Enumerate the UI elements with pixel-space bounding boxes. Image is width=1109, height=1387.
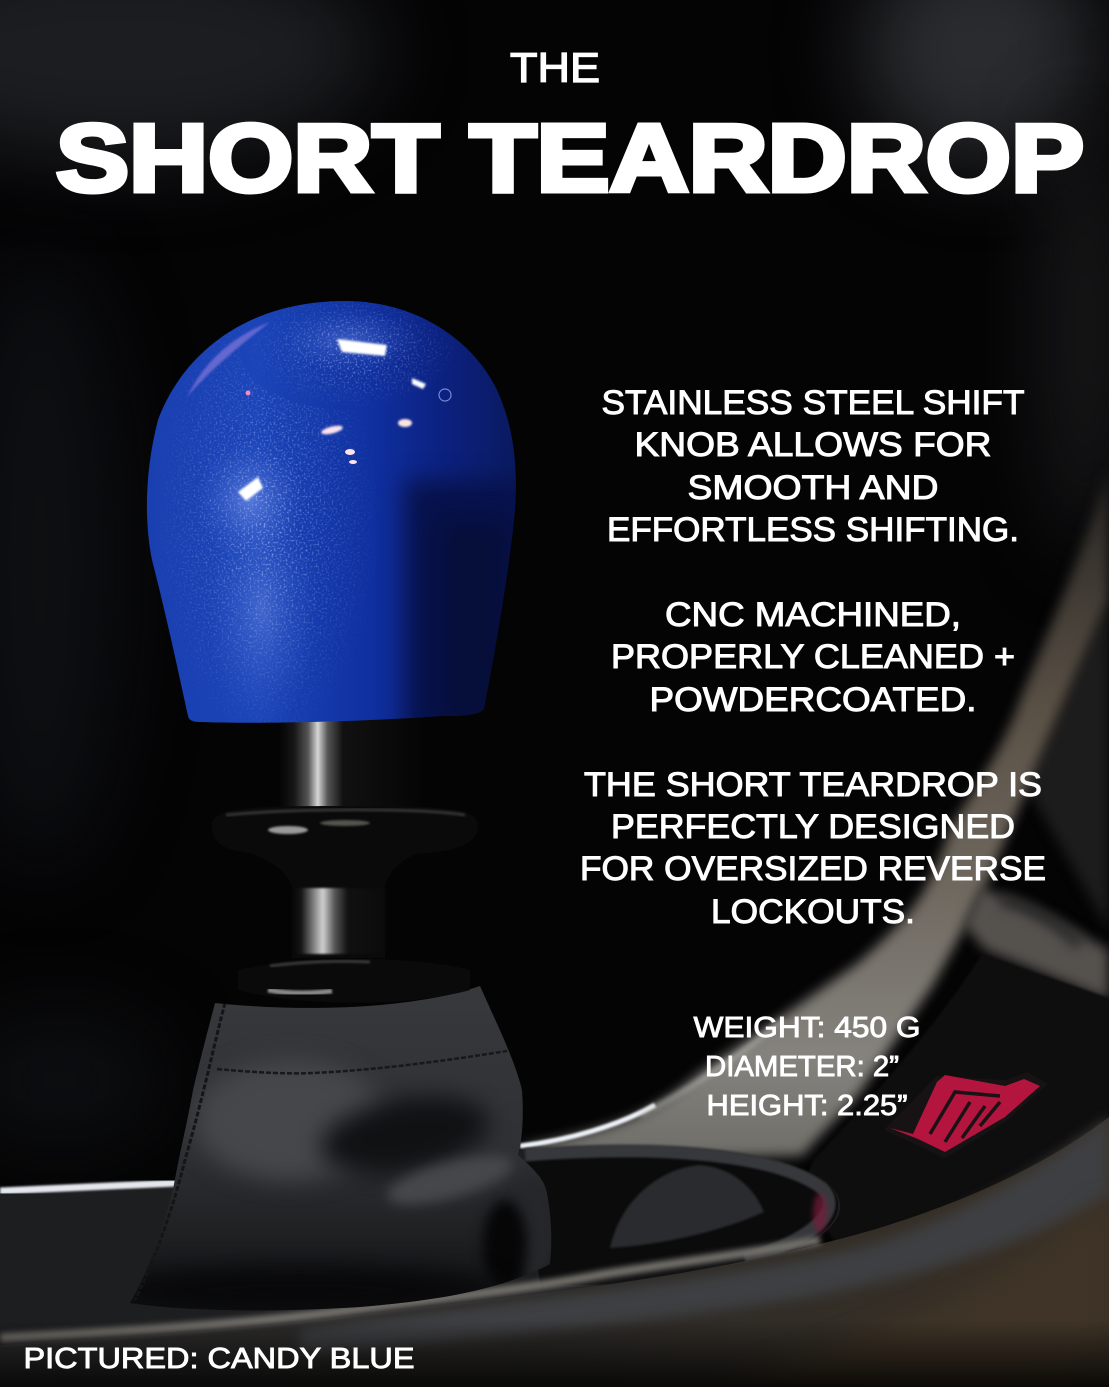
- text block: CNC machined: [611, 596, 1015, 719]
- specifications: [694, 1012, 920, 1122]
- specifications: WEIGHT: 450 G: [694, 1012, 920, 1044]
- text block: oversized reverse lockouts: [580, 766, 1046, 931]
- title: [56, 44, 1084, 212]
- shift knob: [146, 301, 516, 723]
- text block: stainless steel description: STAINLESS STEEL SHIFT: [602, 384, 1024, 422]
- title: THE: [510, 44, 600, 91]
- console floor and shifter bezel: [0, 1117, 1109, 1387]
- text block: CNC machined: POWDERCOATED.: [650, 681, 976, 719]
- text block: oversized reverse lockouts: THE SHORT TEARDROP IS: [584, 766, 1042, 804]
- shifter shaft and collar: [212, 716, 478, 1003]
- specifications: DIAMETER: 2”: [705, 1051, 899, 1083]
- caption: pictured colour: PICTURED: CANDY BLUE: [24, 1343, 415, 1375]
- text block: stainless steel description: [602, 384, 1024, 549]
- specifications: HEIGHT: 2.25”: [706, 1090, 908, 1122]
- text block: oversized reverse lockouts: PERFECTLY DESIGNED: [611, 808, 1015, 846]
- text block: stainless steel description: EFFORTLESS SHIFTING.: [607, 511, 1019, 549]
- icon: STI badge: [884, 1072, 1048, 1158]
- text block: stainless steel description: SMOOTH AND: [688, 469, 938, 507]
- carbon panel behind badge: [800, 954, 1109, 1248]
- console trim curve: [520, 470, 1109, 1160]
- text block: oversized reverse lockouts: LOCKOUTS.: [711, 893, 915, 931]
- leather shift boot: [130, 986, 552, 1310]
- text block: CNC machined: PROPERLY CLEANED +: [611, 638, 1015, 676]
- text block: CNC machined: CNC MACHINED,: [665, 596, 961, 634]
- text block: oversized reverse lockouts: FOR OVERSIZED REVERSE: [580, 850, 1046, 888]
- text block: stainless steel description: KNOB ALLOWS FOR: [634, 426, 992, 464]
- title: SHORT TEARDROP: [56, 105, 1084, 212]
